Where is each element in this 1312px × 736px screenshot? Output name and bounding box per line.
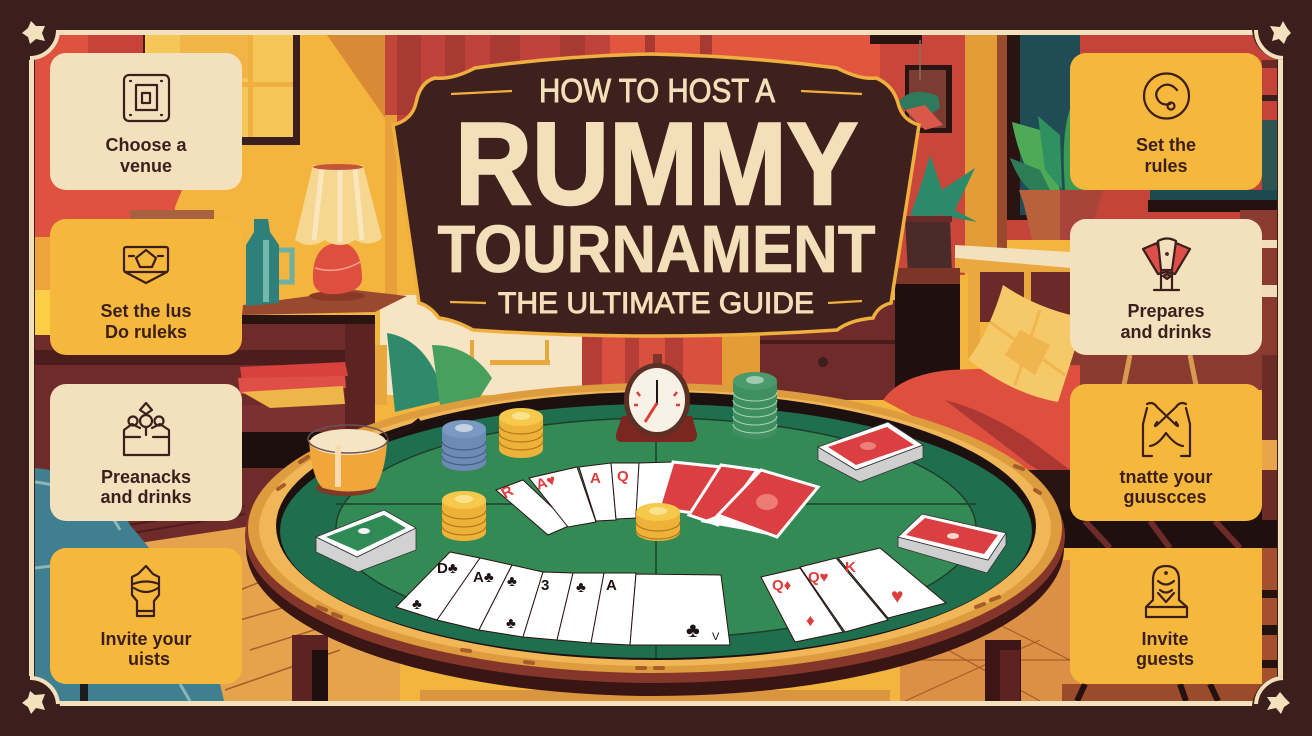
- bottom card fan: V: [712, 631, 720, 643]
- corner ornament top left: [22, 21, 60, 60]
- potted plant near title: [905, 155, 977, 274]
- bottom floor edge: [420, 690, 890, 701]
- bottom card fan: [396, 552, 730, 645]
- top card fan: A♥: [534, 472, 558, 494]
- panel: tnatte your guuscces: tnatte your: [1119, 467, 1213, 487]
- panel: prepares and drinks: and drinks: [1120, 322, 1212, 342]
- title plaque: [393, 54, 919, 336]
- main heading: RUMMY: [455, 98, 858, 229]
- panel: set the rules: [1070, 53, 1262, 190]
- panel: invite your uists: Invite your: [100, 629, 192, 649]
- gold chip stack: [499, 408, 543, 458]
- floor: [144, 527, 1080, 701]
- curtain below title: [582, 336, 760, 386]
- orange wall shadow: [327, 35, 385, 118]
- cream wall below title: [380, 295, 590, 395]
- right card fan: [761, 548, 946, 642]
- right card fan: ♦: [806, 611, 815, 630]
- panel: set the lus: Do ruleks: [105, 322, 187, 342]
- gold chip stack: [442, 491, 486, 541]
- rim studs: [278, 457, 1040, 668]
- throw pillow: [968, 285, 1085, 402]
- green chip stack: [733, 372, 777, 439]
- blue chip stack: [442, 420, 486, 471]
- icon: ring: [1144, 74, 1189, 118]
- top card fan: Q: [617, 468, 629, 485]
- panel: prepares and drinks: Prepares: [1127, 301, 1205, 321]
- icon: bottle figure: [132, 566, 159, 616]
- red deck back right: [818, 422, 923, 482]
- bottom card fan: D♣: [437, 560, 458, 577]
- panel: set the lus: Set the lus: [100, 301, 192, 321]
- panel: invite your uists: [50, 548, 242, 684]
- dark area under sofa: [1058, 506, 1277, 548]
- sill: [955, 245, 1070, 268]
- panel: set the lus: [50, 219, 242, 355]
- red deck right: [898, 514, 1006, 573]
- top card fan: A: [590, 470, 601, 487]
- right red wall: [880, 35, 965, 275]
- bottom card fan: A: [606, 577, 617, 594]
- cabinet right of table: [760, 268, 960, 400]
- panel: preanacks and drinks: Preanacks: [101, 467, 191, 487]
- tournament clock: [616, 354, 697, 442]
- right card fan: Q♦: [772, 577, 792, 594]
- bottom card fan: ♣: [506, 615, 516, 632]
- panel: choose a venue: Choose a: [105, 135, 187, 155]
- left red wall: [35, 35, 182, 237]
- corner ornament bottom left: [22, 676, 60, 714]
- panel: set the rules: Set the: [1136, 135, 1196, 155]
- corner ornament bottom right: [1252, 676, 1290, 714]
- panel: preanacks and drinks: and drinks: [100, 487, 192, 507]
- icon: person bust: [1146, 566, 1187, 617]
- panel: tnatte your guuscces: [1070, 384, 1262, 521]
- panel: set the rules: rules: [1144, 156, 1188, 176]
- thermos: [246, 219, 292, 306]
- window: [1007, 35, 1277, 240]
- panel: invite guests: Invite: [1141, 629, 1189, 649]
- wall picture window: [88, 35, 300, 145]
- icon: venue: [124, 75, 169, 121]
- icon: chest: [124, 247, 168, 283]
- red card backs: [659, 462, 818, 537]
- books on shelf: [238, 362, 348, 408]
- window plant: [1010, 110, 1086, 190]
- icon: red cards with glass: [1143, 238, 1190, 290]
- panel: invite guests: guests: [1136, 649, 1194, 669]
- center gold chip stack: [636, 503, 680, 541]
- hanging plant: [898, 40, 943, 130]
- poker table: [245, 354, 1065, 701]
- papers on desk: [35, 237, 50, 290]
- panel: tnatte your guuscces: guuscces: [1123, 487, 1207, 507]
- table legs: [292, 635, 1021, 701]
- icon: group: [124, 403, 169, 455]
- bottom card fan: ♣: [412, 596, 422, 613]
- sofa: [883, 365, 1080, 470]
- panel: preanacks and drinks: [50, 384, 242, 521]
- panel: invite your uists: uists: [128, 649, 170, 669]
- green felt: [280, 404, 1032, 658]
- panel: prepares and drinks: [1070, 219, 1262, 355]
- corner ornament top right: [1252, 21, 1291, 60]
- green deck: [316, 510, 416, 572]
- bottom card fan: ♣: [576, 579, 586, 596]
- eyebrow heading: HOW TO HOST A: [539, 72, 775, 109]
- lamp: [295, 164, 382, 301]
- wood pillar: [965, 35, 997, 250]
- curtains behind title: [397, 35, 880, 118]
- right card fan: ♥: [891, 585, 903, 608]
- sub heading: TOURNAMENT: [438, 212, 876, 287]
- top card fan: [496, 462, 818, 537]
- book on red wall shelf: [130, 210, 214, 219]
- bottom card fan: ♣: [507, 573, 517, 590]
- right card fan: Q♥: [808, 569, 829, 586]
- bottom card fan: ♣: [686, 619, 700, 642]
- window plant pot: [1019, 190, 1060, 240]
- drink glass: [308, 420, 420, 496]
- panel: invite guests: [1070, 548, 1262, 684]
- bottom card fan: A♣: [473, 569, 494, 586]
- right card fan: K: [845, 559, 856, 576]
- rug: [35, 468, 224, 701]
- table plant: [387, 333, 492, 412]
- bottom card fan: 3: [541, 577, 549, 594]
- wall frame: [870, 35, 952, 133]
- chair back between right panels: [1070, 350, 1262, 390]
- top card fan: R: [498, 482, 517, 502]
- left dresser: [35, 290, 407, 547]
- right chair stripes: [1062, 210, 1277, 701]
- tagline: THE ULTIMATE GUIDE: [498, 287, 814, 320]
- panel: choose a venue: venue: [120, 156, 172, 176]
- icon: crossed ribbons: [1143, 403, 1190, 456]
- panel: choose a venue: [50, 53, 242, 190]
